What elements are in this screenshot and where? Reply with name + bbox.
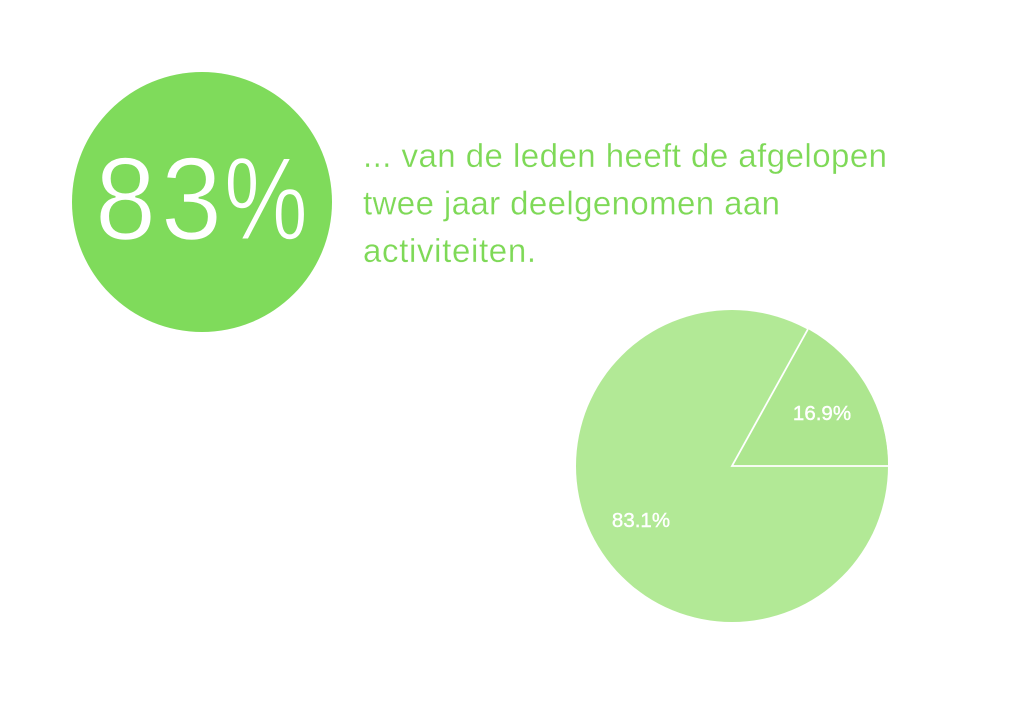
stat value	[95, 132, 308, 265]
label 16.9%: 16.9%	[793, 402, 851, 425]
description text: ... van de leden heeft de afgelopen	[363, 137, 887, 174]
stat circle	[72, 72, 332, 332]
description text: activiteiten.	[363, 232, 536, 269]
description text	[363, 137, 887, 269]
stat value: %	[224, 132, 308, 265]
slice 16.9%	[732, 329, 888, 466]
stat value: 8	[95, 134, 156, 265]
description text: twee jaar deelgenomen aan	[363, 184, 780, 222]
stat value: 3	[161, 134, 222, 265]
label 83.1%: 83.1%	[612, 509, 670, 532]
pie chart	[576, 310, 888, 622]
